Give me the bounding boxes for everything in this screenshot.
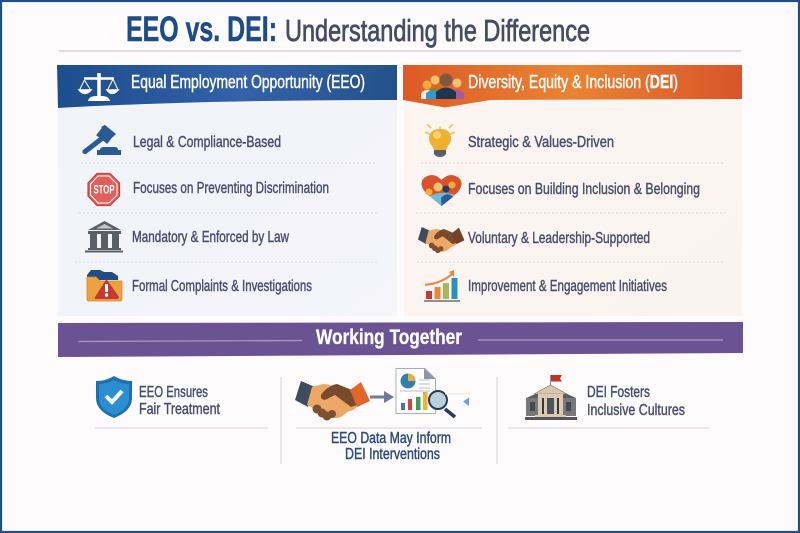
item: complaints: Formal Complaints & Investigations (132, 278, 312, 295)
icon: report with magnifier (396, 368, 455, 417)
panel: DEI (403, 65, 742, 316)
icon: stop sign (88, 174, 120, 206)
column: DEI fosters (525, 375, 685, 420)
item: voluntary (418, 227, 650, 253)
icon: handshake (295, 381, 370, 420)
icon: heart of people (421, 175, 462, 206)
column: EEO ensures: EEO Ensures (139, 384, 208, 401)
item: improvement: Improvement & Engagement Initiatives (468, 278, 667, 295)
banner: working together (58, 322, 743, 357)
item: improvement (424, 270, 667, 301)
icon: growth chart (424, 270, 460, 301)
item: mandatory (85, 221, 289, 252)
banner: working together: Working Together (316, 326, 462, 349)
arrow (370, 391, 394, 403)
EEO panel header (57, 65, 397, 108)
item: discrimination: Focuses on Preventing Discrimination (133, 180, 329, 197)
column: EEO data: DEI Interventions (345, 446, 440, 463)
item: strategic: Strategic & Values-Driven (468, 134, 614, 151)
item: inclusion (421, 175, 700, 206)
panel: EEO (57, 65, 397, 316)
icon: gavel (82, 125, 121, 155)
column: EEO ensures (96, 376, 220, 418)
column: EEO ensures: Fair Treatment (139, 401, 220, 418)
icon: scales of justice (79, 73, 118, 101)
column: EEO data (295, 368, 482, 463)
item: mandatory: Mandatory & Enforced by Law (132, 229, 289, 246)
item: inclusion: Focuses on Building Inclusion & Belonging (468, 181, 700, 198)
column: EEO data: EEO Data May Inform (331, 430, 451, 447)
icon: shield check (96, 376, 132, 418)
item: strategic (425, 124, 614, 157)
item: complaints (87, 270, 312, 301)
icon: handshake (418, 227, 464, 253)
title: Understanding the Difference (285, 13, 590, 48)
icon: warning folder (87, 270, 122, 301)
icon: stop sign: STOP (94, 184, 115, 196)
icon: group of people (421, 74, 464, 99)
item: voluntary: Voluntary & Leadership-Supported (468, 230, 650, 247)
icon: light bulb (425, 124, 455, 157)
column: DEI fosters: Inclusive Cultures (587, 402, 685, 419)
DEI heading: Diversity, Equity & Inclusion (DEI) (468, 72, 678, 92)
title: EEO vs. DEI: (126, 10, 277, 49)
title (126, 10, 590, 49)
EEO heading: Equal Employment Opportunity (EEO) (131, 72, 365, 92)
item: discrimination (88, 174, 329, 206)
icon: flagged building (525, 375, 577, 420)
item: legal: Legal & Compliance-Based (133, 134, 281, 151)
icon: courthouse (85, 221, 123, 252)
DEI panel header (403, 65, 742, 108)
item: legal (82, 125, 281, 155)
column: DEI fosters: DEI Fosters (587, 384, 650, 401)
